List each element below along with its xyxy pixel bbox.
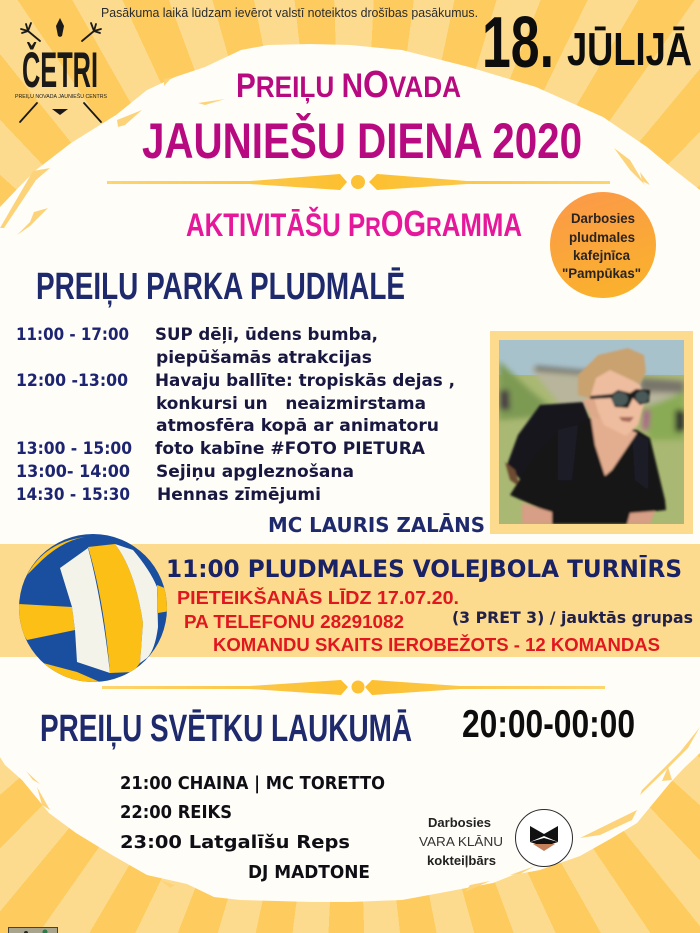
callout: cocktail bar: VARA KLĀNU	[419, 834, 503, 849]
callout: beach cafe: "Pampūkas"	[562, 266, 641, 281]
logo: ČETRI: PREIĻU NOVADA JAUNIEŠU CENTRS	[15, 93, 108, 100]
photo: MC with frame	[490, 331, 693, 534]
team format: (3 PRET 3) / jauktās grupas	[452, 608, 693, 627]
icon: volleyball	[19, 534, 170, 682]
schedule: beach programme: 13:00 - 15:00	[16, 439, 132, 459]
registration details: PIETEIKŠANĀS LĪDZ 17.07.20.	[177, 587, 459, 608]
schedule: beach programme: 12:00 -13:00	[16, 371, 128, 391]
divider top	[107, 174, 610, 190]
heading: volleyball tournament: 11:00 PLUDMALES VOLEJBOLA TURNĪRS	[166, 554, 682, 583]
schedule: beach programme: piepūšamās atrakcijas	[156, 348, 372, 368]
evening line-up: 21:00 CHAINA | MC TORETTO	[120, 773, 385, 794]
logo: ČETRI	[15, 18, 108, 122]
callout: cocktail bar: Darbosies	[428, 815, 491, 830]
band: volleyball tournament	[0, 544, 700, 657]
backpack	[507, 402, 590, 490]
heading: festival square: PREIĻU SVĒTKU LAUKUMĀ	[40, 708, 412, 750]
MC name: MC LAURIS ZALĀNS	[268, 513, 485, 537]
callout: beach cafe: kafejnīca	[573, 248, 630, 263]
sunglasses	[590, 389, 650, 408]
face	[590, 368, 645, 436]
registration details: KOMANDU SKAITS IEROBEŽOTS - 12 KOMANDAS	[213, 634, 660, 655]
schedule: beach programme: 11:00 - 17:00	[16, 325, 129, 345]
schedule: beach programme: Hennas zīmējumi	[157, 485, 321, 505]
schedule: beach programme: Sejiņu apgleznošana	[156, 462, 354, 482]
callout: beach cafe: Darbosies	[571, 211, 635, 226]
callout: beach cafe	[550, 192, 656, 298]
torso	[510, 418, 666, 524]
title: JAUNIEŠU DIENA 2020	[142, 112, 582, 169]
heading: park beach: PREIĻU PARKA PLUDMALĒ	[36, 266, 405, 308]
evening line-up	[120, 773, 385, 883]
top safety notice: Pasākuma laikā lūdzam ievērot valstī noteiktos drošības pasākumus.	[101, 6, 478, 20]
schedule: beach programme	[16, 325, 455, 505]
divider bottom	[102, 680, 605, 695]
title	[142, 64, 582, 169]
sponsor logo fragment	[8, 928, 58, 933]
heading: activity programme: AKTIVITĀŠU PROGRAMMA	[186, 203, 522, 244]
callout: cocktail bar	[419, 815, 503, 868]
hair	[578, 348, 646, 398]
arm	[522, 503, 552, 524]
schedule: beach programme: foto kabīne #FOTO PIETURA	[155, 439, 426, 459]
registration details	[177, 587, 660, 655]
neck and chest	[590, 412, 637, 476]
schedule: beach programme: atmosfēra kopā ar animatoru	[156, 416, 439, 436]
schedule: beach programme: konkursi un neaizmirstama	[156, 394, 426, 414]
title: PREIĻU NOVADA	[236, 64, 461, 106]
date: 18. jūlijā: 18.	[482, 3, 554, 83]
schedule: beach programme: Havaju ballīte: tropiskās dejas ,	[155, 371, 455, 391]
registration details: PA TELEFONU 28291082	[184, 611, 404, 632]
evening line-up: 22:00 REIKS	[120, 802, 232, 823]
evening line-up: 23:00 Latgalīšu Reps	[120, 832, 350, 853]
icon: fox logo	[516, 810, 572, 866]
date: 18. jūlijā	[482, 3, 692, 83]
evening line-up: DJ MADTONE	[248, 862, 370, 883]
evening time: 20:00-00:00	[462, 703, 635, 746]
schedule: beach programme: SUP dēļi, ūdens bumba,	[155, 325, 378, 345]
callout: cocktail bar: kokteiļbārs	[427, 853, 496, 868]
schedule: beach programme: 13:00- 14:00	[16, 462, 130, 482]
callout: beach cafe: pludmales	[569, 230, 635, 245]
schedule: beach programme: 14:30 - 15:30	[16, 485, 130, 505]
logo: ČETRI: ČETRI	[22, 41, 98, 98]
